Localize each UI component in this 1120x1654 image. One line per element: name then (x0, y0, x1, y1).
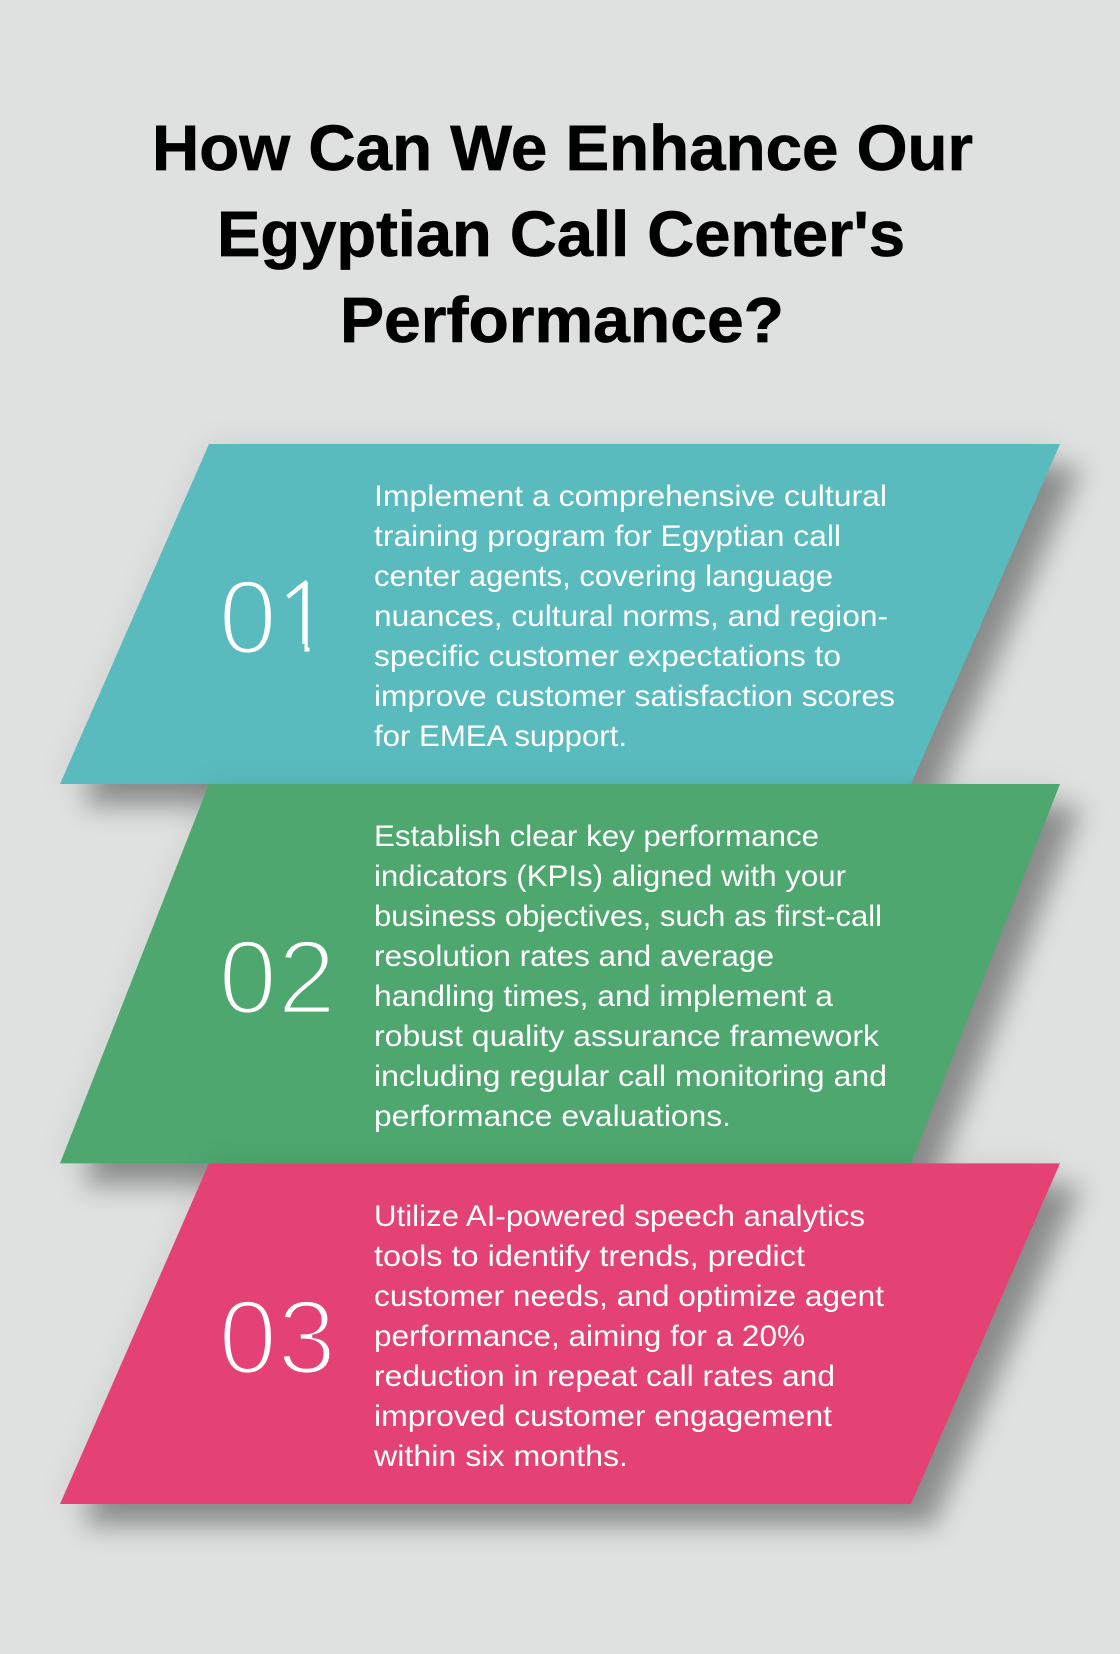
number 03: 03 (218, 1280, 336, 1396)
text: step 02 description: robust quality assurance framework (374, 1020, 880, 1053)
text: step 03 description (373, 1200, 885, 1473)
title: Egyptian Call Center's (217, 198, 905, 270)
text: step 02 description: handling times, and implement a (374, 980, 833, 1013)
text: step 01 description: specific customer expectations to (374, 640, 841, 673)
text: step 01 description: improve customer satisfaction scores (374, 680, 895, 713)
text: step 02 description: performance evaluations. (374, 1100, 731, 1133)
text: step 03 description: within six months. (373, 1440, 628, 1473)
number 01: 1 (274, 560, 332, 676)
text: step 01 description (374, 480, 895, 753)
text: step 03 description: reduction in repeat call rates and (374, 1360, 835, 1393)
text: step 03 description: customer needs, and optimize agent (374, 1280, 885, 1313)
number 01: 0 (218, 560, 277, 676)
number 01 (224, 580, 310, 653)
number 02: 02 (218, 920, 336, 1036)
panel: step 02 (60, 784, 1060, 1163)
title: How Can We Enhance Our (152, 112, 973, 184)
panel: step 01 (60, 444, 1060, 784)
text: step 01 description: nuances, cultural norms, and region- (374, 600, 888, 633)
text: step 03 description: Utilize AI-powered speech analytics (374, 1200, 865, 1233)
text: step 01 description: for EMEA support. (374, 720, 627, 753)
text: step 02 description: Establish clear key performance (374, 820, 819, 853)
text: step 02 description (374, 820, 887, 1133)
text: step 01 description: Implement a comprehensive cultural (374, 480, 887, 513)
panel: step 03 (60, 1163, 1060, 1504)
text: step 02 description: resolution rates and average (374, 940, 774, 973)
title: Performance? (340, 284, 784, 356)
title (152, 112, 973, 356)
text: step 02 description: business objectives, such as first-call (374, 900, 882, 933)
text: step 02 description: including regular call monitoring and (374, 1060, 887, 1093)
text: step 01 description: training program for Egyptian call (374, 520, 841, 553)
text: step 03 description: performance, aiming for a 20% (374, 1320, 805, 1353)
text: step 02 description: indicators (KPIs) aligned with your (374, 860, 846, 893)
text: step 03 description: tools to identify trends, predict (374, 1240, 806, 1273)
text: step 01 description: center agents, covering language (374, 560, 833, 593)
text: step 03 description: improved customer engagement (374, 1400, 833, 1433)
